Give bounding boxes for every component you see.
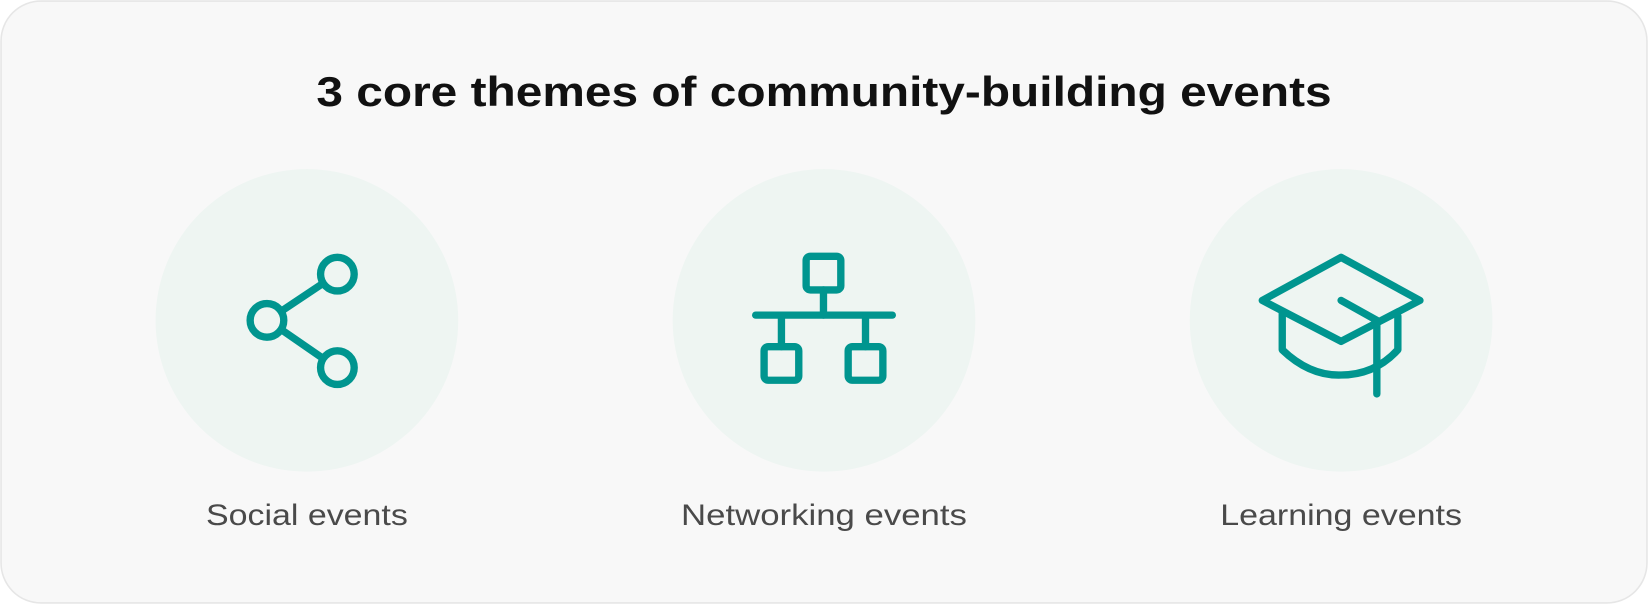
panel: networking events [673, 169, 975, 532]
label: social events: Social events [206, 499, 408, 532]
title: 3 core themes of community-building events [316, 68, 1332, 115]
icon: network [756, 256, 892, 380]
icon circle: learning [1190, 169, 1492, 472]
panel: learning events [1190, 169, 1492, 532]
icon: share [250, 257, 354, 384]
icon circle: networking [673, 169, 975, 472]
icon: graduation cap [1262, 257, 1420, 394]
icon circle: social [156, 169, 458, 472]
label: learning events: Learning events [1220, 499, 1462, 532]
label: networking events: Networking events [681, 499, 967, 532]
panel: social events [156, 169, 458, 532]
